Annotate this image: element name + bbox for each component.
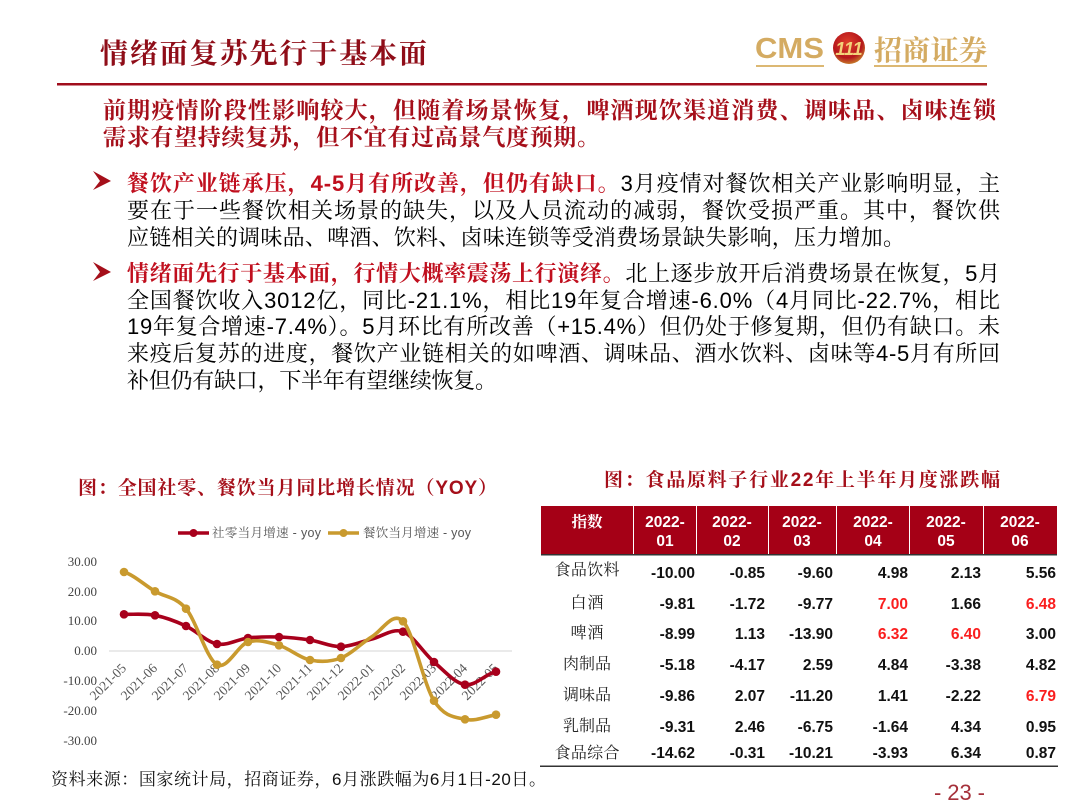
text block: bullet 1 — [127, 171, 1001, 251]
text block: bullet 1: 应链相关的调味品、啤酒、饮料、卤味连锁等受消费场景缺失影响，压力增加。 — [127, 225, 905, 251]
row: 肉制品: -5.18 — [660, 657, 695, 674]
x axis labels: 2021-06 — [118, 660, 160, 703]
row: 肉制品: 肉制品 — [563, 655, 611, 673]
y axis labels: 0.00 — [74, 643, 97, 658]
row: 啤酒: 啤酒 — [570, 624, 604, 642]
row: 乳制品: -1.64 — [873, 719, 908, 736]
table header — [541, 506, 1057, 556]
table header: 05 — [937, 533, 955, 550]
row: 肉制品: 2.59 — [803, 657, 833, 674]
x axis labels: 2021-12 — [304, 661, 346, 703]
table heading: 图：食品原料子行业22年上半年月度涨跌幅 — [604, 468, 1000, 491]
y axis labels: 10.00 — [68, 613, 97, 628]
row: 食品饮料: 5.56 — [1026, 565, 1056, 582]
row: 白酒: 6.48 — [1026, 596, 1056, 613]
row: 食品综合: -10.21 — [789, 745, 833, 762]
x axis labels: 2022-02 — [366, 661, 408, 703]
row: 啤酒 — [570, 624, 1056, 643]
row: 调味品: -2.22 — [946, 688, 981, 705]
text block: bullet 2: 来疫后复苏的进度，餐饮产业链相关的如啤酒、调味品、酒水饮料、卤味等4-5月有所回 — [127, 341, 1000, 367]
data table — [540, 506, 1058, 767]
x axis labels — [87, 660, 501, 703]
x axis labels: 2022-01 — [335, 661, 377, 703]
row: 乳制品 — [563, 717, 1056, 736]
y axis labels: -30.00 — [63, 733, 97, 748]
headline summary: 需求有望持续复苏，但不宜有过高景气度预期。 — [103, 124, 600, 151]
row: 食品饮料 — [554, 561, 1056, 582]
table header: 2022- — [782, 514, 822, 531]
headline summary — [103, 97, 997, 151]
table header: 2022- — [712, 514, 752, 531]
row: 肉制品: -4.17 — [730, 657, 765, 674]
row: 白酒 — [570, 594, 1056, 613]
row: 调味品: 6.79 — [1026, 688, 1056, 705]
row: 食品饮料: 2.13 — [951, 565, 981, 582]
table header: 2022- — [853, 514, 893, 531]
logo: CMS: 招商证券 — [874, 34, 987, 66]
text block: bullet 1: 餐饮产业链承压，4-5月有所改善，但仍有缺口。3月疫情对餐饮相关产业影响明显，主 — [127, 171, 1000, 197]
row: 白酒: -9.81 — [660, 596, 695, 613]
icon: bullet arrow 1 — [93, 171, 111, 190]
y axis labels: -20.00 — [63, 703, 97, 718]
logo: CMS: CMS — [755, 33, 824, 65]
row: 啤酒: 1.13 — [735, 626, 765, 643]
y axis labels: -10.00 — [63, 673, 97, 688]
x axis labels: 2021-05 — [87, 660, 129, 703]
row: 啤酒: 6.40 — [951, 626, 981, 643]
row: 乳制品: 2.46 — [735, 719, 765, 736]
row: 啤酒: -8.99 — [660, 626, 695, 643]
row: 食品综合: 食品综合 — [554, 744, 620, 762]
x axis labels: 2021-11 — [273, 661, 315, 703]
text block: bullet 2: 补但仍有缺口，下半年有望继续恢复。 — [127, 368, 497, 394]
series: retail sales — [120, 610, 500, 689]
row: 调味品: 1.41 — [878, 688, 908, 705]
row: 肉制品: 4.84 — [878, 657, 908, 674]
x axis labels: 2021-08 — [180, 660, 222, 703]
row: 食品饮料: 4.98 — [878, 565, 908, 582]
text block: bullet 2: 19年复合增速-7.4%）。5月环比有所改善（+15.4%）但仍处于修复期，但仍有缺口。未 — [127, 314, 1000, 340]
y axis labels: 30.00 — [68, 554, 97, 569]
row: 乳制品: 乳制品 — [563, 717, 611, 735]
row: 调味品 — [563, 686, 1056, 705]
x axis labels: 2021-10 — [242, 660, 284, 703]
page number: - 23 - — [934, 780, 985, 805]
row: 啤酒: 3.00 — [1026, 626, 1056, 643]
table header: 03 — [793, 533, 811, 550]
x axis labels: 2021-07 — [149, 660, 191, 703]
x axis labels: 2021-09 — [211, 660, 253, 703]
row: 调味品: 2.07 — [735, 688, 765, 705]
legend: 餐饮当月增速 - yoy — [363, 525, 472, 540]
row: 食品综合: 6.34 — [951, 745, 981, 762]
row: 白酒: -9.77 — [798, 596, 833, 613]
row: 肉制品 — [563, 655, 1056, 674]
icon: bullet arrow 2 — [93, 262, 111, 281]
table header: 02 — [723, 533, 741, 550]
title: 情绪面复苏先行于基本面 — [100, 38, 427, 69]
x axis labels: 2022-05 — [459, 660, 501, 703]
chart heading: 图：全国社零、餐饮当月同比增长情况（YOY） — [78, 476, 497, 499]
row: 调味品: -9.86 — [660, 688, 695, 705]
text block: bullet 2: 情绪面先行于基本面，行情大概率震荡上行演绎。北上逐步放开后消费场景在恢复，5月 — [127, 261, 1000, 287]
row: 食品综合: -14.62 — [651, 745, 695, 762]
row: 啤酒: -13.90 — [789, 626, 833, 643]
x axis labels: 2022-03 — [397, 660, 439, 703]
row: 乳制品: -9.31 — [660, 719, 695, 736]
x axis labels: 2022-04 — [428, 660, 470, 703]
row: 乳制品: 0.95 — [1026, 719, 1056, 736]
row: 食品综合 — [554, 744, 1056, 762]
row: 白酒: 白酒 — [570, 594, 604, 612]
table header: 2022- — [926, 514, 966, 531]
row: 啤酒: 6.32 — [878, 626, 908, 643]
logo: CMS — [755, 32, 987, 67]
row: 白酒: -1.72 — [730, 596, 765, 613]
row: 食品综合: 0.87 — [1026, 745, 1056, 762]
legend — [178, 525, 472, 540]
row: 肉制品: 4.82 — [1026, 657, 1056, 674]
text block: bullet 2 — [127, 261, 1000, 394]
text block: bullet 2: 全国餐饮收入3012亿，同比-21.1%，相比19年复合增速-6.0%（4月同比-22.7%，相比 — [127, 288, 1000, 314]
table header: 指数 — [571, 512, 603, 531]
row: 食品饮料: -10.00 — [651, 565, 695, 582]
row: 调味品: -11.20 — [790, 688, 833, 705]
headline summary: 前期疫情阶段性影响较大，但随着场景恢复，啤酒现饮渠道消费、调味品、卤味连锁 — [103, 97, 997, 124]
row: 食品饮料: 食品饮料 — [554, 561, 620, 579]
series: catering — [120, 568, 500, 724]
table header: 06 — [1011, 533, 1029, 550]
legend: 社零当月增速 - yoy — [212, 525, 322, 540]
row: 肉制品: -3.38 — [946, 657, 981, 674]
table header: 2022- — [645, 514, 685, 531]
row: 白酒: 7.00 — [878, 596, 908, 613]
row: 食品饮料: -9.60 — [798, 565, 833, 582]
icon: logo ball — [833, 32, 865, 64]
y axis labels: 20.00 — [68, 584, 97, 599]
source note: 资料来源：国家统计局，招商证券，6月涨跌幅为6月1日-20日。 — [51, 770, 546, 789]
row: 白酒: 1.66 — [951, 596, 981, 613]
row: 乳制品: -6.75 — [798, 719, 833, 736]
row: 食品综合: -3.93 — [873, 745, 908, 762]
table header: 01 — [656, 533, 674, 550]
row: 调味品: 调味品 — [563, 686, 611, 704]
row: 乳制品: 4.34 — [951, 719, 981, 736]
table header: 2022- — [1000, 514, 1040, 531]
row: 食品综合: -0.31 — [730, 745, 765, 762]
row: 食品饮料: -0.85 — [730, 565, 765, 582]
text block: bullet 1: 要在于一些餐饮相关场景的缺失，以及人员流动的减弱，餐饮受损严重。其中，餐饮供 — [127, 198, 1001, 224]
y axis labels — [63, 554, 97, 748]
icon: logo ball: 111 — [835, 39, 863, 59]
table header: 04 — [864, 533, 882, 550]
line chart — [63, 525, 512, 748]
